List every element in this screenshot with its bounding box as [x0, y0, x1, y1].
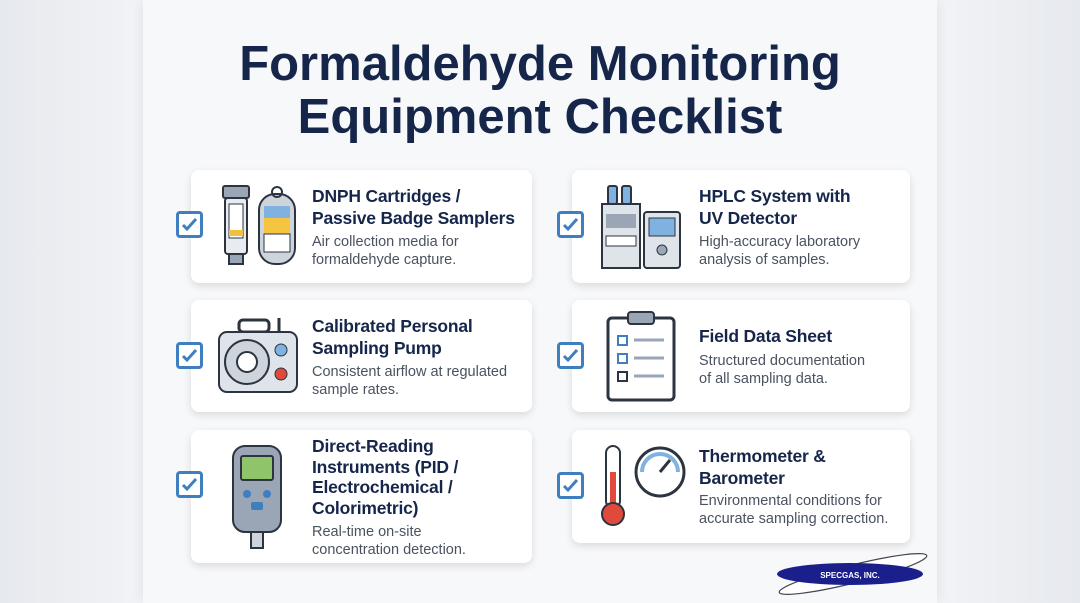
- logo: SPECGAS: [777, 553, 928, 595]
- heading: [699, 186, 850, 228]
- checkbox: [557, 211, 584, 238]
- checkbox: [557, 342, 584, 369]
- heading: [312, 436, 458, 518]
- heading: Electrochemical /: [312, 477, 453, 497]
- heading: Field Data Sheet: [699, 326, 832, 346]
- card: thermometer: [572, 430, 910, 543]
- description: [699, 353, 865, 387]
- description: Structured documentation: [699, 353, 865, 369]
- card: DNPH: [191, 170, 532, 283]
- heading: Instruments (PID /: [312, 456, 458, 476]
- heading: DNPH Cartridges /: [312, 186, 460, 206]
- icon: pump: [218, 318, 298, 393]
- checkbox: [176, 342, 203, 369]
- icon: handheld meter: [232, 445, 282, 549]
- heading: Calibrated Personal: [312, 316, 473, 336]
- description: [699, 493, 888, 527]
- heading: Direct-Reading: [312, 436, 434, 456]
- heading: Sampling Pump: [312, 338, 442, 358]
- icon: HPLC: [601, 185, 681, 269]
- description: High-accuracy laboratory: [699, 234, 860, 250]
- heading: Colorimetric): [312, 498, 418, 518]
- description: accurate sampling correction.: [699, 511, 888, 527]
- icon: clipboard: [606, 311, 676, 402]
- heading: [312, 316, 473, 358]
- checkbox: [176, 471, 203, 498]
- panel: background: [143, 0, 937, 603]
- description: [312, 364, 507, 398]
- icon: thermometer and gauge: [601, 445, 686, 526]
- description: [312, 524, 466, 558]
- title: [239, 37, 841, 144]
- heading: HPLC System with: [699, 186, 850, 206]
- title: Formaldehyde Monitoring: [239, 37, 841, 91]
- description: sample rates.: [312, 382, 399, 398]
- description: analysis of samples.: [699, 252, 830, 268]
- description: concentration detection.: [312, 542, 466, 558]
- icon: cartridge and badge: [222, 185, 296, 265]
- heading: [312, 186, 515, 228]
- description: [699, 234, 860, 268]
- description: [312, 234, 459, 268]
- heading: UV Detector: [699, 208, 797, 228]
- logo: SPECGAS: SPECGAS, INC.: [820, 571, 880, 580]
- description: Environmental conditions for: [699, 493, 882, 509]
- description: Air collection media for: [312, 234, 459, 250]
- checkbox: [557, 472, 584, 499]
- description: of all sampling data.: [699, 371, 828, 387]
- card: HPLC: [572, 170, 910, 283]
- heading: [699, 446, 826, 488]
- description: Consistent airflow at regulated: [312, 364, 507, 380]
- card: pump: [191, 300, 532, 412]
- checkbox: [176, 211, 203, 238]
- card: direct-reading: [191, 430, 532, 563]
- heading: Thermometer &: [699, 446, 826, 466]
- heading: Passive Badge Samplers: [312, 208, 515, 228]
- description: formaldehyde capture.: [312, 252, 456, 268]
- card: field data sheet: [572, 300, 910, 412]
- description: Real-time on-site: [312, 524, 422, 540]
- heading: Barometer: [699, 468, 785, 488]
- title: Equipment Checklist: [298, 90, 782, 144]
